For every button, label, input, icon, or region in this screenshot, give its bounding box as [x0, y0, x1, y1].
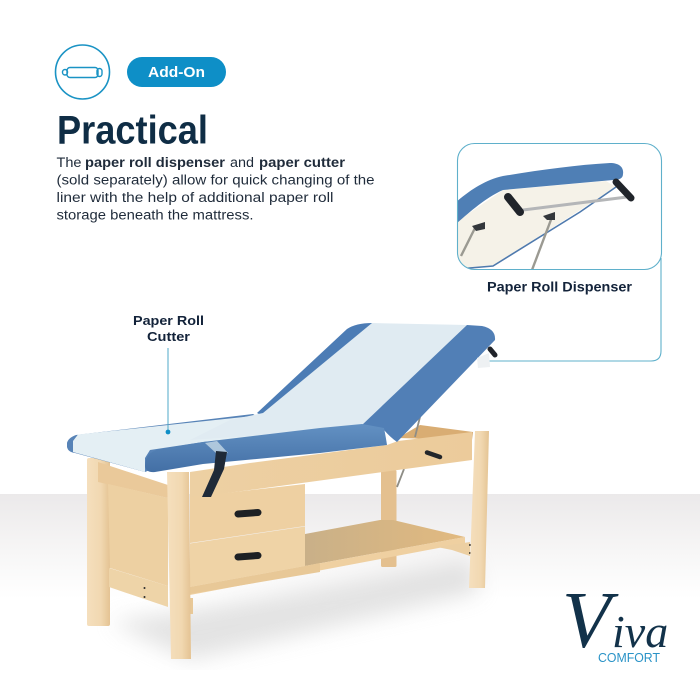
- back left leg: [87, 458, 110, 626]
- inner box of apron: [398, 425, 473, 440]
- back right leg: [381, 470, 396, 567]
- logo: Viva Comfort: V: [562, 577, 619, 665]
- callout line: dispenser: [484, 258, 661, 363]
- back cushion right band: [362, 325, 495, 442]
- rail dots: [144, 544, 471, 598]
- cutter band: [205, 441, 228, 454]
- inset cushion: [455, 163, 623, 223]
- seat front cushion: [145, 424, 387, 472]
- apron front: [190, 432, 472, 498]
- title: Practical: [57, 108, 208, 152]
- back cushion left band: [257, 323, 380, 420]
- description text: (sold separately) allow for quick changing of the: [56, 172, 374, 188]
- description text: [56, 155, 374, 222]
- strut: [397, 417, 420, 487]
- logo: Viva Comfort: [562, 577, 668, 665]
- lower drawer: [190, 526, 305, 587]
- shelf: [190, 520, 465, 595]
- description text: paper cutter: [259, 155, 346, 170]
- description text: storage beneath the mattress.: [56, 208, 254, 222]
- inset: paper roll dispenser close-up: [455, 143, 662, 270]
- description text: and: [230, 155, 254, 170]
- badge: Add-On: [127, 57, 226, 87]
- badge: Add-On: Add-On: [148, 65, 205, 81]
- logo: Viva Comfort: COMFORT: [598, 650, 660, 665]
- seat back band and end: [67, 414, 258, 472]
- seat paper: [73, 416, 366, 472]
- front left leg: [167, 472, 191, 659]
- callout: paper roll cutter: Cutter: [147, 329, 190, 344]
- apron handle: [427, 452, 440, 457]
- inset rod: [523, 197, 627, 210]
- logo: Viva Comfort: iva: [612, 606, 668, 657]
- inset brackets: [508, 182, 631, 212]
- drawer handles: [238, 512, 258, 557]
- lower rail tab: [190, 598, 193, 614]
- callout: paper roll cutter: Paper Roll: [133, 313, 204, 328]
- inset struts: [461, 217, 552, 270]
- description text: The: [56, 155, 82, 170]
- front right leg: [469, 431, 489, 588]
- label: Paper Roll Dispenser: Paper Roll Dispenser: [487, 280, 633, 294]
- lower rail: [109, 568, 168, 607]
- apron left side: [98, 462, 168, 498]
- description text: liner with the help of additional paper roll: [56, 190, 334, 205]
- upper drawer: [190, 484, 305, 543]
- floor shadow: [110, 560, 480, 660]
- inset underside board: [456, 181, 616, 270]
- back paper: [190, 323, 467, 440]
- callout: paper roll cutter: [133, 313, 204, 434]
- cross rail right: [437, 542, 470, 556]
- description text: paper roll dispenser: [85, 155, 226, 170]
- inset small brackets: [472, 212, 555, 231]
- dispenser on table: [477, 349, 495, 368]
- treatment table: [67, 323, 495, 659]
- inset board edge: [458, 187, 616, 269]
- bottom front rail: [190, 563, 320, 594]
- icon: paper roll: [56, 45, 110, 99]
- cutter strap: [202, 451, 227, 497]
- side panel: [108, 484, 168, 586]
